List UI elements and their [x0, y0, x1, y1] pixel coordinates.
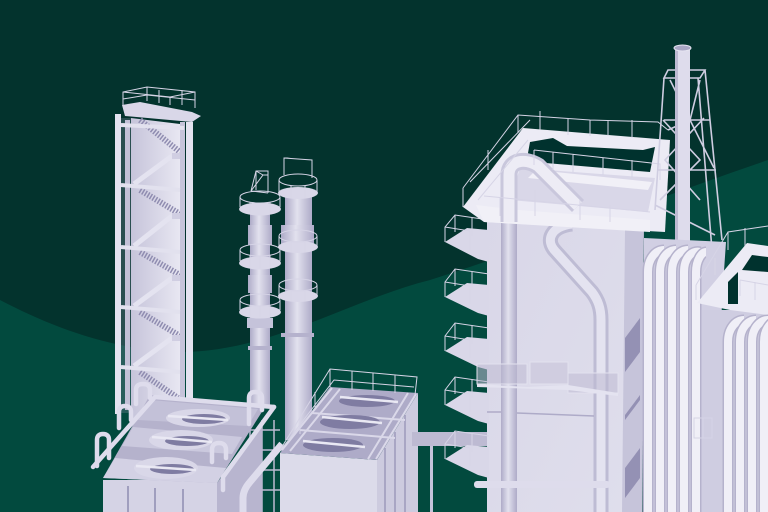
tower columns — [115, 114, 193, 414]
column two shaft — [285, 190, 312, 440]
roof platform — [463, 128, 670, 232]
front thick pipe — [243, 444, 282, 512]
building side wall — [622, 220, 644, 512]
right pipes — [728, 320, 768, 512]
pipe bundle — [648, 250, 706, 512]
small side railing — [694, 418, 712, 438]
tower back panel — [131, 118, 180, 420]
right unit front — [280, 453, 377, 512]
base block behind pipes — [644, 238, 726, 512]
walkway railings — [445, 215, 489, 466]
panel: column one — [239, 171, 281, 408]
roof pipe bend — [509, 161, 578, 222]
roof railings — [463, 111, 668, 222]
tower roof — [122, 102, 201, 122]
mid walkway — [477, 362, 618, 396]
pipes around left unit — [93, 384, 274, 490]
lower horizontal pipe — [474, 481, 610, 488]
panel: column two — [278, 158, 318, 440]
right unit fans — [303, 395, 398, 452]
left unit top — [103, 395, 265, 483]
right platform hole — [742, 255, 768, 272]
right unit side — [377, 393, 418, 512]
right unit railing — [280, 369, 417, 450]
right dark gap — [728, 272, 738, 304]
roof hole — [528, 138, 655, 172]
roof lower deck — [510, 168, 655, 212]
panel: central pipes — [644, 238, 726, 512]
left unit side — [217, 420, 262, 512]
panel: main building — [445, 111, 670, 512]
vertical pipe left — [501, 218, 517, 512]
tower beams — [121, 125, 184, 372]
background: green hill curve — [0, 160, 768, 512]
right unit top — [280, 387, 418, 460]
column one railings — [240, 171, 280, 317]
panel: cooling unit left — [93, 384, 282, 512]
side wall shadow stripes — [625, 318, 640, 498]
side walkways — [445, 228, 489, 478]
wall bands — [487, 412, 594, 416]
lattice legs and braces — [655, 70, 722, 250]
pipe support — [430, 446, 433, 512]
column two railings — [279, 158, 317, 301]
column one shaft — [250, 208, 270, 408]
pipe lattice between units — [230, 420, 285, 512]
panel: lattice tower and stack — [655, 45, 722, 253]
panel: right building — [694, 226, 768, 512]
right building wall — [702, 310, 768, 512]
column two platforms — [278, 187, 318, 302]
tower railing — [123, 87, 195, 108]
tower back bracing — [121, 118, 131, 413]
smokestack — [675, 48, 690, 253]
building front wall — [487, 218, 625, 512]
stair flights — [134, 120, 181, 398]
panel: stair tower — [115, 87, 201, 420]
left unit front — [103, 480, 217, 512]
right unit deck bars — [282, 388, 416, 459]
curved pipe on wall — [550, 224, 601, 512]
fans — [134, 409, 230, 479]
right railing — [696, 226, 768, 300]
panel: cooling unit right — [280, 369, 418, 512]
stack rim — [674, 45, 691, 51]
connector pipe — [412, 432, 488, 446]
column one platforms — [239, 202, 281, 318]
right platform — [697, 243, 768, 315]
roof front ledge — [476, 205, 650, 232]
